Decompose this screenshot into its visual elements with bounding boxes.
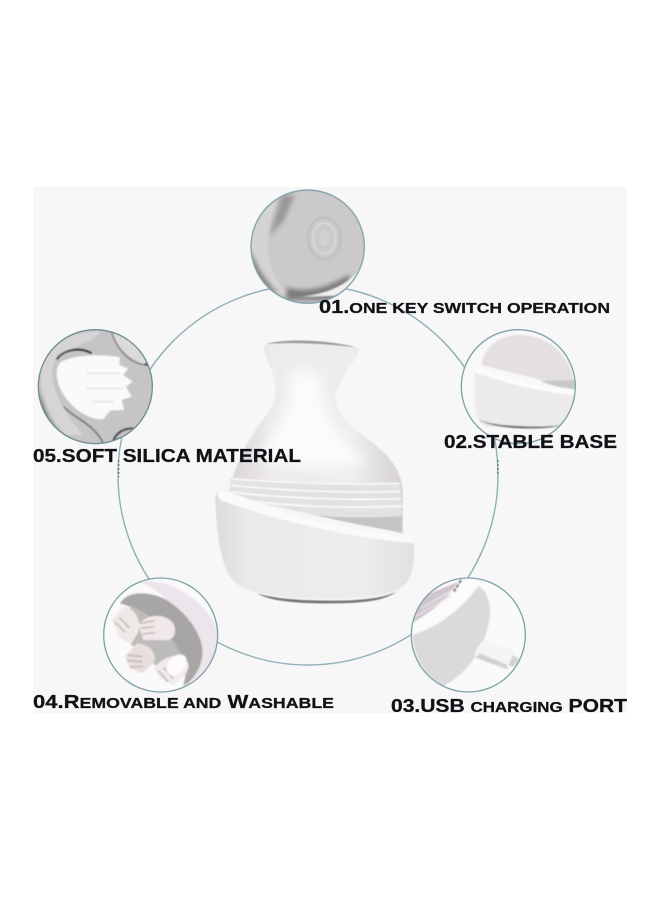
connecting ring bbox=[118, 285, 498, 665]
callout circle 01: power button bbox=[250, 187, 364, 303]
product: scalp massager bbox=[215, 340, 414, 603]
callout circle 05: soft silica head bbox=[38, 328, 153, 444]
label 03: 03.USB CHARGING PORT bbox=[391, 696, 627, 716]
label 01: 01. ONE KEY SWITCH OPERATION bbox=[319, 297, 610, 317]
silicone bristles bbox=[57, 355, 133, 419]
power button bbox=[308, 217, 341, 259]
infographic bbox=[34, 189, 627, 712]
label 05: 05.SOFT SILICA MATERIAL bbox=[33, 446, 301, 466]
massage heads bbox=[112, 607, 191, 685]
label 04: 04.R EMOVABLE AND W ASHABLE bbox=[33, 692, 334, 712]
usb plug bbox=[474, 642, 482, 656]
callout circle 03: usb charging port bbox=[410, 578, 525, 692]
massager base bbox=[215, 490, 414, 603]
ribbed grip lines bbox=[229, 478, 403, 530]
callout circle 02: stable base bbox=[461, 330, 577, 444]
callout circle 04: removable heads bbox=[104, 578, 218, 692]
background panel bbox=[33, 187, 627, 713]
massager body bbox=[229, 340, 403, 533]
label 02: 02.STABLE BASE bbox=[444, 432, 617, 452]
